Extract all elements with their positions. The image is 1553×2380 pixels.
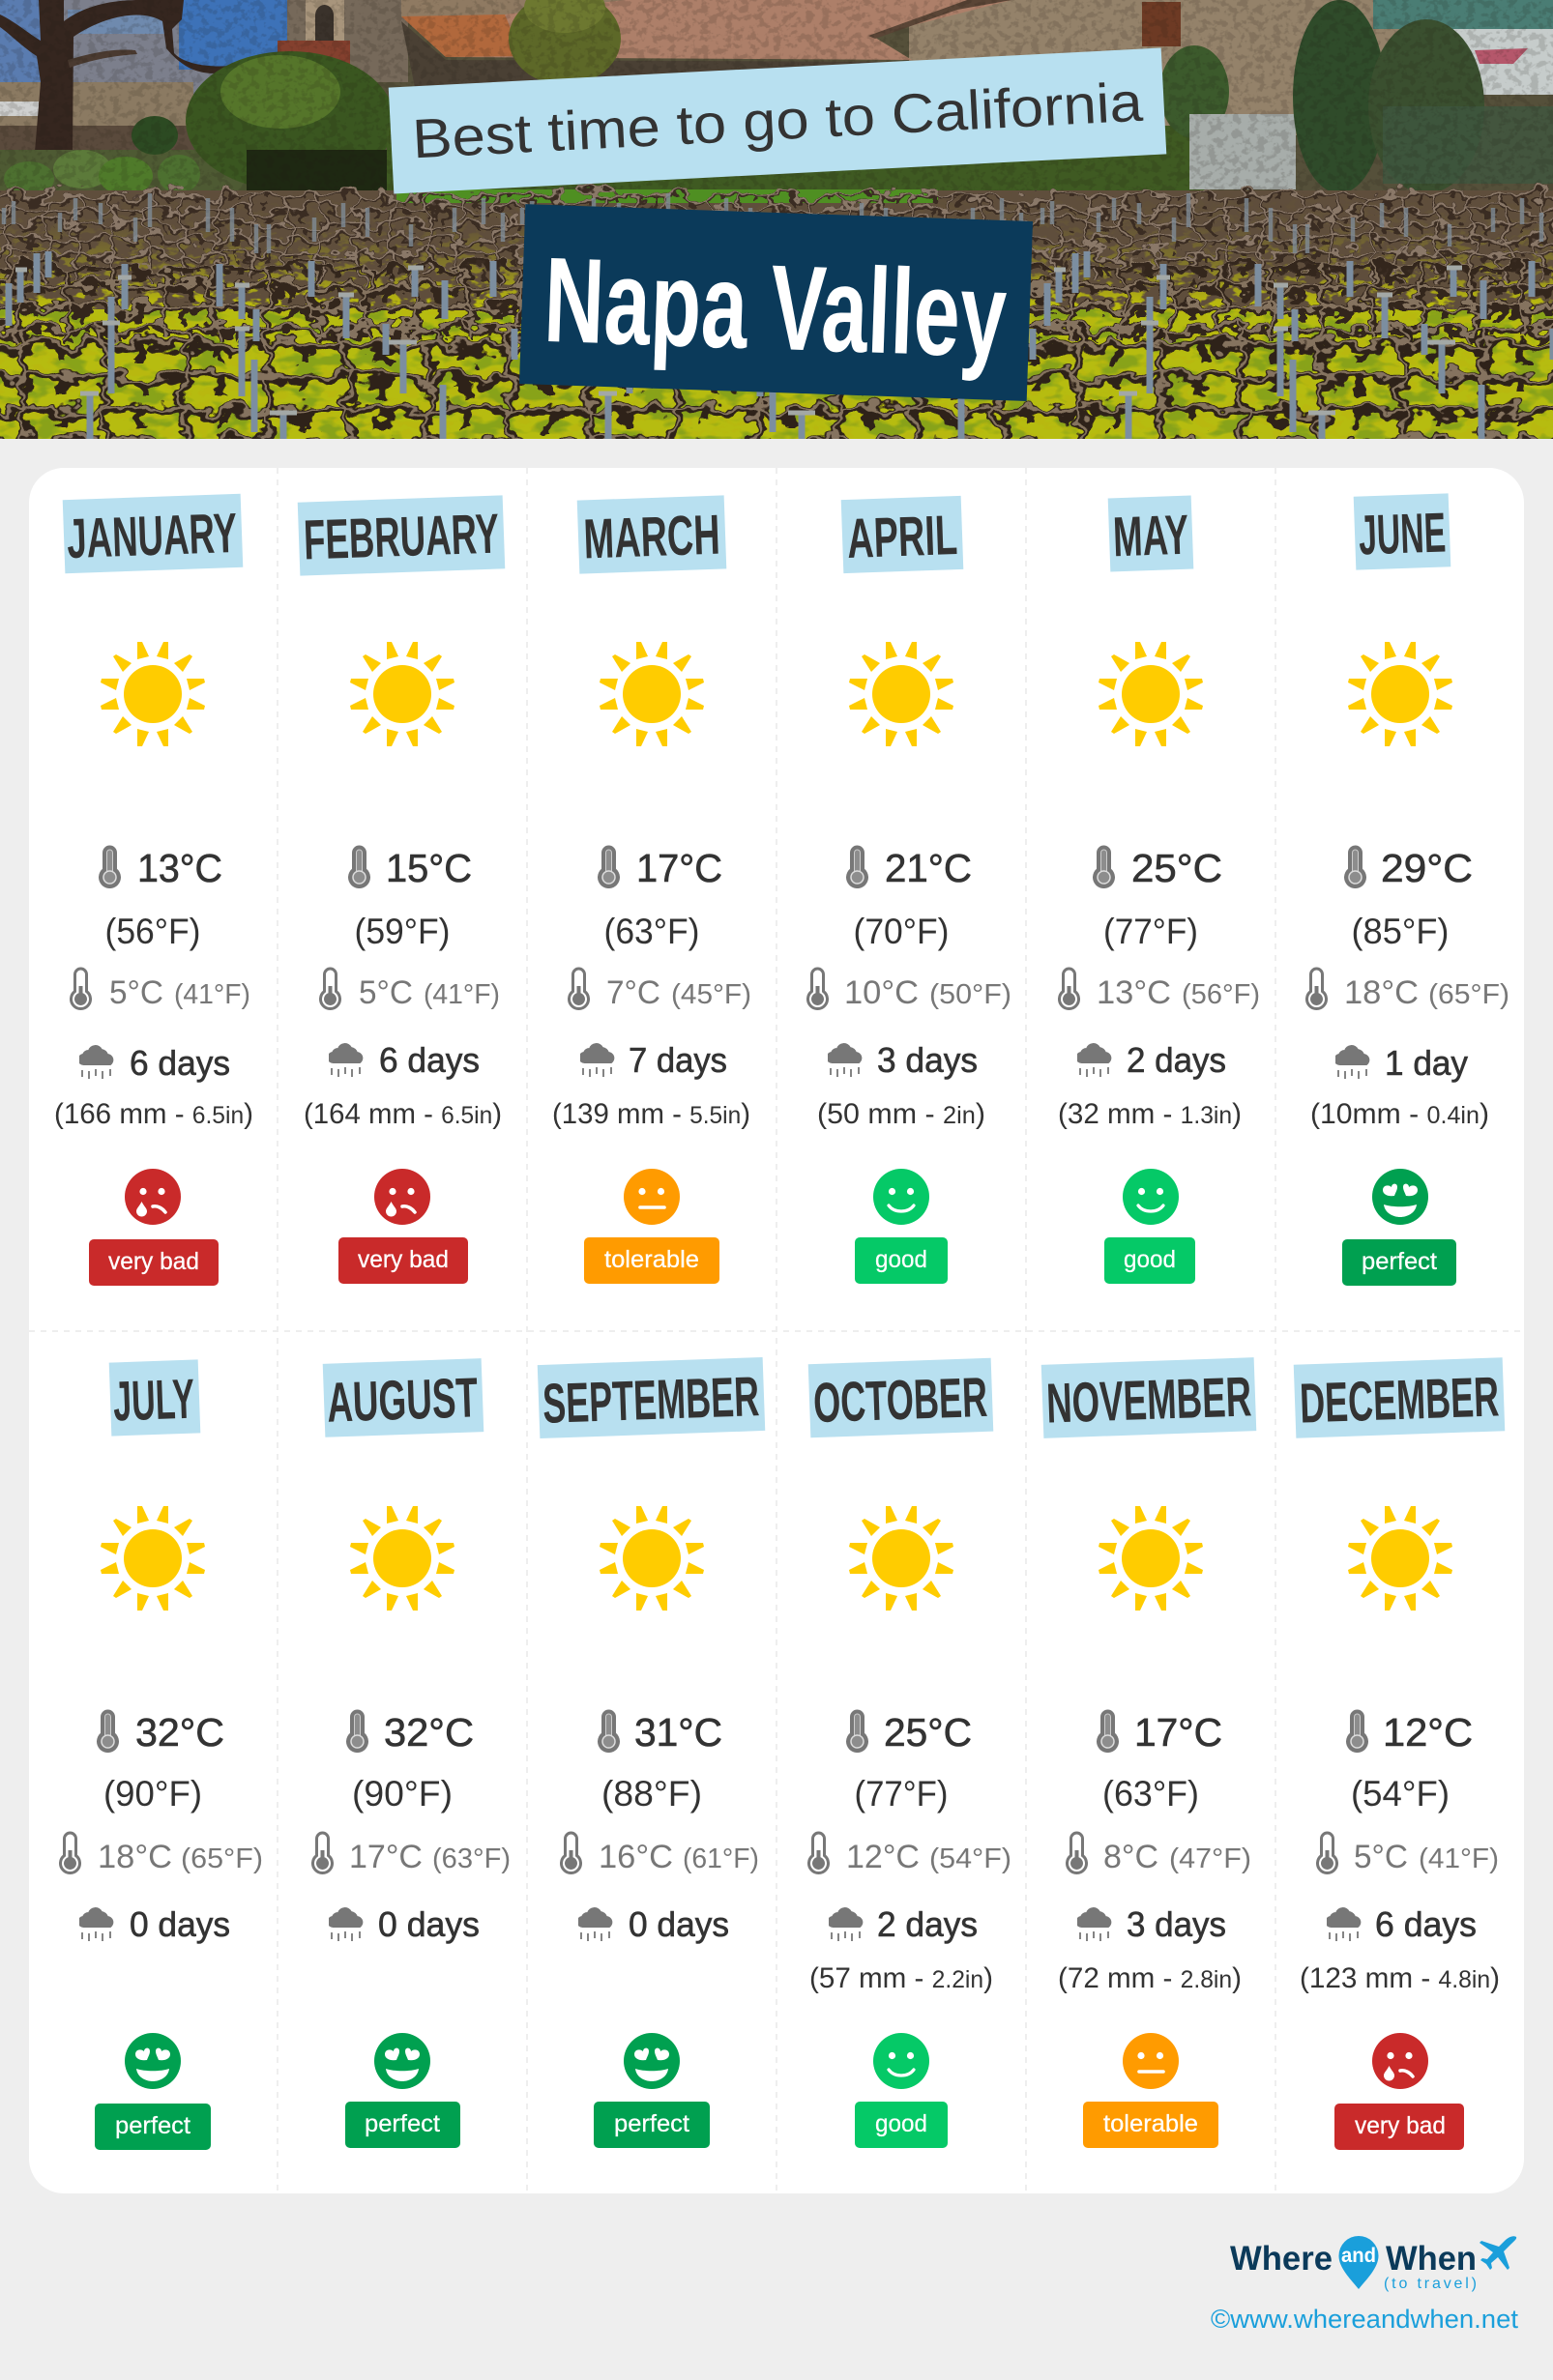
low temperature: 10°C bbox=[844, 974, 919, 1011]
low temperature: 12°C bbox=[846, 1839, 920, 1875]
low temperature bbox=[808, 1833, 1011, 1875]
month heading bbox=[1354, 493, 1450, 570]
low temperature: 5°C bbox=[359, 974, 413, 1011]
low temperature: 5°C bbox=[109, 974, 163, 1011]
month heading: NOVEMBER bbox=[1045, 1365, 1252, 1436]
low temperature bbox=[1307, 969, 1509, 1011]
rating badge bbox=[338, 1237, 468, 1284]
high temperature: 29°C bbox=[1381, 846, 1473, 890]
high temperature: 32°C bbox=[135, 1710, 224, 1755]
rain days: 3 days bbox=[1127, 1904, 1226, 1944]
month heading bbox=[1108, 496, 1193, 571]
rating badge: tolerable bbox=[604, 1246, 699, 1273]
high temperature fahrenheit: (77°F) bbox=[1103, 912, 1198, 951]
rainfall: (10mm - 0.4in) bbox=[1310, 1098, 1489, 1130]
high temperature fahrenheit: (59°F) bbox=[354, 912, 451, 951]
rating badge: perfect bbox=[115, 2112, 190, 2139]
rating badge bbox=[89, 1239, 219, 1286]
rain days: 6 days bbox=[379, 1040, 480, 1080]
low temperature bbox=[72, 969, 250, 1011]
low temperature bbox=[321, 969, 500, 1011]
rain days bbox=[1076, 1904, 1226, 1944]
rain days bbox=[328, 1904, 480, 1944]
rating badge bbox=[584, 1237, 719, 1284]
low temperature: 5°C bbox=[1354, 1839, 1408, 1875]
low temperature: 16°C bbox=[599, 1839, 673, 1875]
rating badge bbox=[1342, 1239, 1456, 1286]
icon: plane bbox=[1480, 2236, 1516, 2270]
logo: Where and When: When bbox=[1386, 2240, 1477, 2278]
icon: rating face bbox=[1372, 2033, 1428, 2089]
icon: sun bbox=[350, 642, 454, 746]
icon: rating face bbox=[374, 1169, 430, 1225]
rain days: 1 day bbox=[1385, 1043, 1468, 1083]
high temperature: 13°C bbox=[137, 846, 222, 890]
rating badge bbox=[1104, 1237, 1195, 1284]
month card: July bbox=[60, 1359, 263, 2150]
month card: January bbox=[54, 494, 253, 1286]
icon: sun bbox=[600, 642, 704, 746]
rain days bbox=[328, 1040, 480, 1080]
rain days: 7 days bbox=[629, 1040, 727, 1080]
low temperature: 13°C bbox=[1097, 974, 1171, 1011]
icon: sun bbox=[1348, 1506, 1452, 1611]
high temperature fahrenheit: (85°F) bbox=[1352, 912, 1449, 951]
icon: rating face bbox=[873, 2033, 929, 2089]
rating badge: good bbox=[875, 1246, 927, 1273]
rain days: 3 days bbox=[877, 1040, 978, 1080]
rainfall: (50 mm - 2in) bbox=[817, 1098, 985, 1130]
rainfall: (164 mm - 6.5in) bbox=[304, 1098, 502, 1130]
rating badge bbox=[855, 1237, 948, 1284]
low temperature bbox=[1317, 1833, 1499, 1875]
low temperature: 17°C bbox=[349, 1839, 423, 1875]
low temperature: 8°C bbox=[1103, 1839, 1158, 1875]
rain days bbox=[827, 1040, 978, 1080]
low temperature: (54°F) bbox=[929, 1843, 1011, 1874]
low temperature: (41°F) bbox=[1419, 1843, 1499, 1874]
month heading: SEPTEMBER bbox=[542, 1365, 760, 1436]
month heading: APRIL bbox=[846, 504, 958, 570]
icon: map pin bbox=[1338, 2236, 1379, 2289]
rain days bbox=[1334, 1043, 1468, 1083]
rain days bbox=[828, 1904, 978, 1944]
high temperature: 15°C bbox=[386, 846, 472, 890]
rain days: 0 days bbox=[378, 1904, 480, 1944]
high temperature: 17°C bbox=[636, 846, 722, 890]
copyright link: ©www.whereandwhen.net bbox=[1211, 2305, 1518, 2334]
month heading bbox=[109, 1359, 200, 1437]
rain days bbox=[577, 1904, 729, 1944]
rainfall: (72 mm - 2.8in) bbox=[1058, 1962, 1242, 1994]
high temperature: 31°C bbox=[634, 1710, 722, 1755]
subtitle banner bbox=[389, 48, 1166, 193]
month heading: JUNE bbox=[1358, 501, 1447, 567]
rainfall: (139 mm - 5.5in) bbox=[552, 1098, 750, 1130]
high temperature bbox=[846, 1709, 972, 1755]
low temperature bbox=[313, 1833, 511, 1875]
icon: sun bbox=[600, 1506, 704, 1611]
month heading bbox=[577, 495, 726, 574]
low temperature: (47°F) bbox=[1169, 1843, 1251, 1874]
rain days bbox=[1076, 1040, 1226, 1080]
logo: Where and When: Where bbox=[1230, 2240, 1333, 2278]
high temperature bbox=[598, 1709, 722, 1755]
icon: rating face bbox=[125, 2033, 181, 2089]
month card: May bbox=[1058, 496, 1260, 1284]
high temperature bbox=[99, 845, 222, 890]
logo: Where and When bbox=[1230, 2236, 1516, 2292]
icon: sun bbox=[101, 1506, 205, 1611]
rating badge: perfect bbox=[1362, 1248, 1437, 1275]
icon: sun bbox=[1099, 642, 1203, 746]
rating badge bbox=[95, 2104, 211, 2150]
sky and distant trees bbox=[64, 0, 215, 95]
rating badge: perfect bbox=[614, 2110, 689, 2137]
high temperature fahrenheit: (56°F) bbox=[104, 912, 201, 951]
icon: sun bbox=[1099, 1506, 1203, 1611]
low temperature bbox=[1060, 969, 1260, 1011]
stone tower bbox=[287, 0, 408, 82]
month heading: FEBRUARY bbox=[303, 502, 500, 572]
subtitle text: Best time to go to California bbox=[411, 72, 1144, 170]
rainfall: (32 mm - 1.3in) bbox=[1058, 1098, 1242, 1130]
month heading bbox=[808, 1358, 993, 1437]
icon: sun bbox=[849, 642, 953, 746]
high temperature: 32°C bbox=[384, 1710, 474, 1755]
hero photo: Napa Valley winery and vineyard bbox=[0, 0, 1553, 454]
month heading: MARCH bbox=[582, 504, 721, 570]
rainfall: (166 mm - 6.5in) bbox=[54, 1098, 253, 1130]
month heading bbox=[298, 495, 505, 576]
high temperature fahrenheit: (63°F) bbox=[1102, 1774, 1199, 1814]
icon: sun bbox=[1348, 642, 1452, 746]
high temperature bbox=[348, 845, 472, 890]
high temperature fahrenheit: (70°F) bbox=[853, 912, 950, 951]
month heading bbox=[841, 496, 963, 573]
icon: rating face bbox=[873, 1169, 929, 1225]
icon: rating face bbox=[1123, 2033, 1179, 2089]
icon: sun bbox=[101, 642, 205, 746]
high temperature fahrenheit: (63°F) bbox=[603, 912, 700, 951]
vineyard bbox=[0, 309, 1553, 439]
rating badge: very bad bbox=[358, 1246, 449, 1273]
high temperature bbox=[97, 1709, 224, 1755]
low temperature: 7°C bbox=[606, 974, 660, 1011]
rain days bbox=[579, 1040, 727, 1080]
month card: February bbox=[298, 495, 505, 1284]
low temperature bbox=[60, 1833, 263, 1875]
high temperature: 21°C bbox=[885, 846, 972, 890]
rain days: 0 days bbox=[629, 1904, 729, 1944]
high temperature bbox=[598, 845, 722, 890]
low temperature: (45°F) bbox=[671, 979, 751, 1010]
month heading: JULY bbox=[112, 1368, 195, 1433]
high temperature fahrenheit: (54°F) bbox=[1351, 1774, 1450, 1814]
logo: Where and When: and bbox=[1341, 2245, 1376, 2267]
high temperature bbox=[1346, 1709, 1473, 1755]
month heading: JANUARY bbox=[66, 502, 238, 570]
month card: August bbox=[313, 1358, 511, 2148]
high temperature bbox=[1097, 1709, 1222, 1755]
icon: sun bbox=[350, 1506, 454, 1611]
low temperature: (61°F) bbox=[683, 1843, 759, 1874]
title banner bbox=[519, 204, 1033, 401]
rating badge: perfect bbox=[365, 2110, 440, 2137]
month card: September bbox=[538, 1357, 765, 2148]
low temperature bbox=[808, 969, 1011, 1011]
icon: rating face bbox=[624, 1169, 680, 1225]
month card: June bbox=[1307, 493, 1509, 1286]
month card: April bbox=[808, 496, 1011, 1284]
month heading bbox=[63, 494, 243, 573]
month card: October bbox=[808, 1358, 1011, 2148]
rating badge: good bbox=[875, 2110, 927, 2137]
high temperature bbox=[1093, 845, 1222, 890]
rain days bbox=[78, 1904, 230, 1944]
main roof bbox=[401, 0, 1011, 60]
month heading bbox=[323, 1358, 483, 1437]
rain days: 6 days bbox=[130, 1043, 230, 1083]
title text: Napa Valley bbox=[542, 233, 1009, 383]
high temperature fahrenheit: (90°F) bbox=[103, 1774, 202, 1814]
month card: November bbox=[1041, 1357, 1256, 2148]
rating badge bbox=[345, 2102, 460, 2148]
high temperature bbox=[346, 1709, 474, 1755]
rating badge bbox=[594, 2102, 710, 2148]
month card: December bbox=[1294, 1357, 1505, 2150]
low temperature: (50°F) bbox=[929, 979, 1011, 1010]
month heading: AUGUST bbox=[326, 1366, 479, 1435]
high temperature bbox=[1344, 845, 1473, 890]
low temperature: (41°F) bbox=[424, 979, 500, 1010]
bushes bbox=[0, 150, 247, 190]
month heading: OCTOBER bbox=[812, 1366, 988, 1435]
high temperature fahrenheit: (88°F) bbox=[601, 1774, 702, 1814]
logo: Where and When: (to travel) bbox=[1384, 2276, 1477, 2292]
icon: rating face bbox=[1123, 1169, 1179, 1225]
low temperature: 18°C bbox=[98, 1839, 172, 1875]
low temperature: 18°C bbox=[1344, 974, 1419, 1011]
icon: rating face bbox=[125, 1169, 181, 1225]
panel: monthly weather table bbox=[29, 468, 1524, 2193]
low temperature bbox=[569, 969, 751, 1011]
low temperature: (41°F) bbox=[174, 979, 250, 1010]
month card: March bbox=[552, 495, 751, 1284]
rainfall: (57 mm - 2.2in) bbox=[809, 1962, 993, 1994]
rain days bbox=[1326, 1904, 1477, 1944]
rating badge bbox=[1334, 2104, 1464, 2150]
high temperature fahrenheit: (90°F) bbox=[352, 1774, 453, 1814]
rain days bbox=[78, 1043, 230, 1083]
high temperature: 12°C bbox=[1383, 1710, 1473, 1755]
low temperature: (56°F) bbox=[1182, 979, 1260, 1010]
palm tree bbox=[509, 6, 621, 79]
low temperature: (63°F) bbox=[432, 1843, 511, 1874]
rain days: 6 days bbox=[1375, 1904, 1477, 1944]
stone wall, right bbox=[909, 0, 1402, 135]
icon: rating face bbox=[1372, 1169, 1428, 1225]
high temperature: 17°C bbox=[1134, 1710, 1222, 1755]
rating badge: very bad bbox=[1355, 2112, 1446, 2139]
rating badge: very bad bbox=[108, 1248, 199, 1275]
icon: rating face bbox=[624, 2033, 680, 2089]
low temperature: (65°F) bbox=[1428, 979, 1509, 1010]
rating badge: tolerable bbox=[1103, 2110, 1198, 2137]
low temperature bbox=[1068, 1833, 1251, 1875]
high temperature: 25°C bbox=[1131, 846, 1222, 890]
rating badge: good bbox=[1124, 1246, 1176, 1273]
high temperature bbox=[846, 845, 972, 890]
big oak tree bbox=[0, 0, 230, 152]
month heading bbox=[1041, 1357, 1256, 1438]
month heading bbox=[538, 1357, 765, 1438]
low temperature: (65°F) bbox=[181, 1843, 263, 1874]
rain days: 0 days bbox=[130, 1904, 230, 1944]
high temperature fahrenheit: (77°F) bbox=[855, 1774, 948, 1814]
high temperature: 25°C bbox=[884, 1710, 972, 1755]
rain days: 2 days bbox=[877, 1904, 978, 1944]
rating badge bbox=[855, 2102, 948, 2148]
rainfall: (123 mm - 4.8in) bbox=[1300, 1962, 1500, 1994]
icon: rating face bbox=[374, 2033, 430, 2089]
rain days: 2 days bbox=[1127, 1040, 1226, 1080]
rating badge bbox=[1083, 2102, 1218, 2148]
month heading: MAY bbox=[1112, 504, 1189, 568]
icon: sun bbox=[849, 1506, 953, 1611]
low temperature bbox=[561, 1833, 759, 1875]
